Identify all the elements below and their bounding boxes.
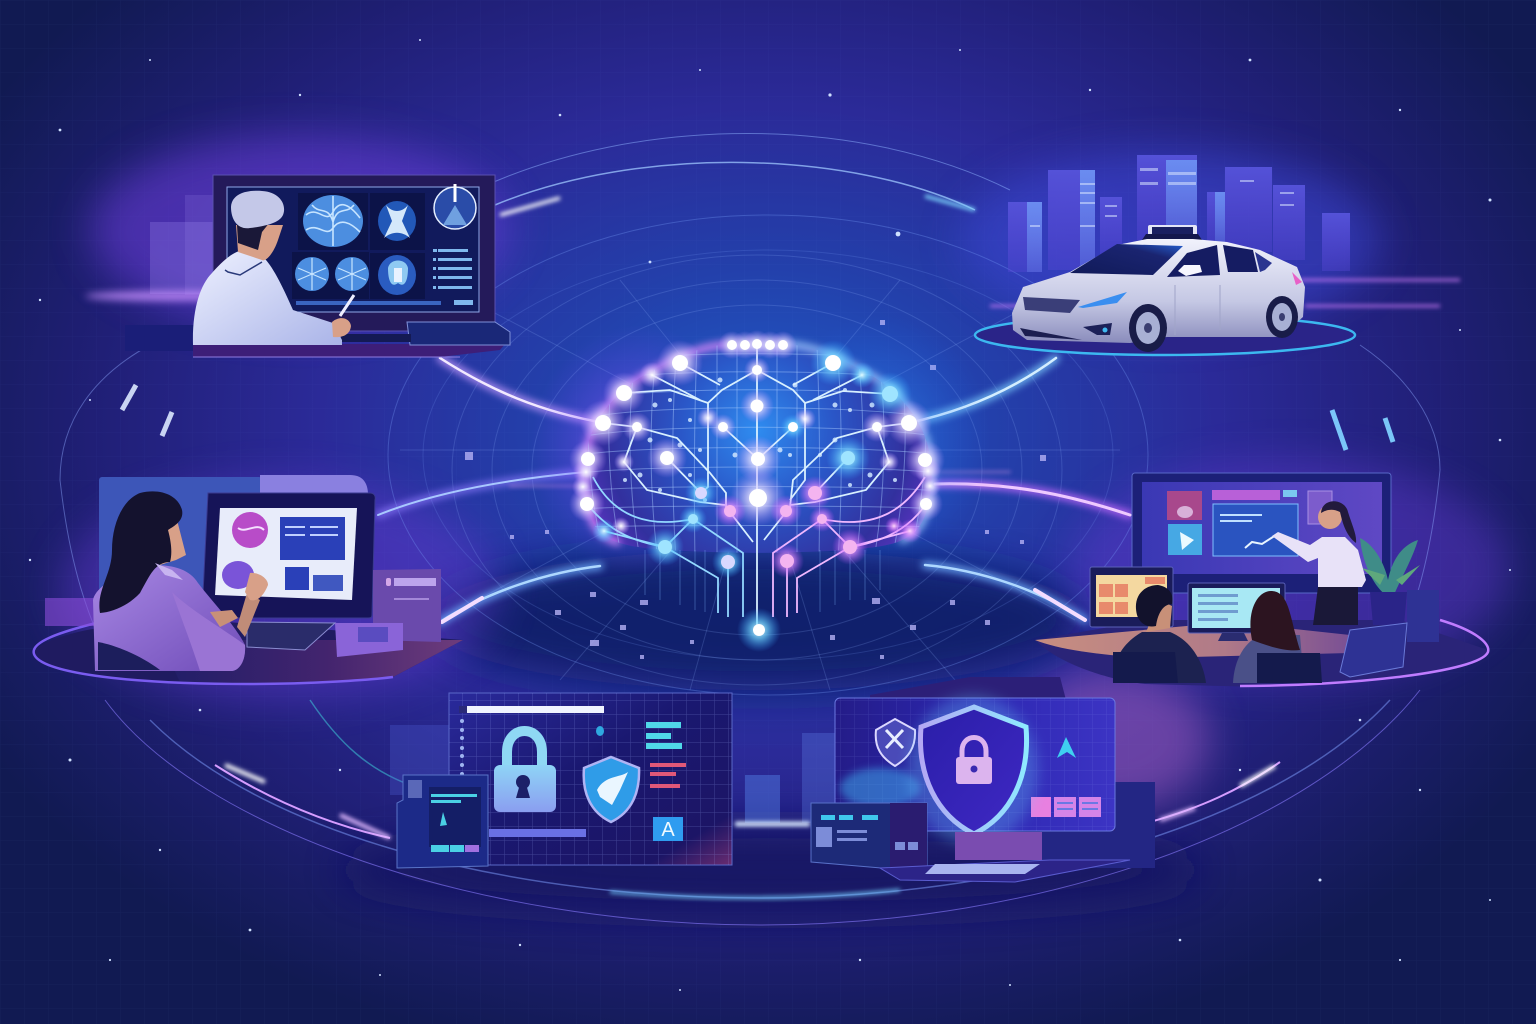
- wall screen: [1132, 473, 1391, 593]
- panel: team presentation: [1035, 473, 1488, 687]
- brain speckles: [623, 378, 897, 502]
- seated man: [1113, 585, 1206, 683]
- doctor: [193, 191, 354, 345]
- orbital rings: [60, 133, 1440, 925]
- brain rim glow: [584, 344, 932, 543]
- keyboard: [247, 622, 335, 650]
- icon: small shield: [584, 757, 639, 822]
- icon: large shield: [908, 695, 1038, 845]
- platform: [33, 620, 463, 684]
- icon: A badge: [653, 817, 683, 841]
- side unit: [1407, 590, 1439, 642]
- server block: [811, 803, 927, 872]
- panel: medical imaging: [85, 175, 510, 357]
- tablet: [335, 623, 403, 657]
- panel: lock screen: [390, 693, 732, 868]
- plant: [1360, 538, 1420, 625]
- side unit: [373, 569, 441, 642]
- platform: [1035, 620, 1488, 687]
- icon: padlock: [494, 731, 556, 812]
- monitor: [213, 175, 495, 331]
- city glow between panels: [735, 733, 835, 824]
- panel: shield security: [811, 677, 1155, 882]
- small monitors: [1090, 567, 1173, 627]
- fading drop lines: [645, 550, 880, 612]
- nodes: [569, 330, 945, 652]
- laptop: [880, 860, 1130, 882]
- panel: autonomous car: [975, 155, 1460, 355]
- brain mesh: [580, 345, 940, 560]
- icon: A badge: A: [661, 819, 675, 841]
- medical keyboard: [407, 322, 510, 345]
- skyline: [1008, 155, 1350, 272]
- radial network around brain: [400, 255, 1120, 690]
- monitor: [202, 493, 375, 618]
- circuit lines: blue: [603, 344, 909, 630]
- woman: [93, 491, 268, 671]
- empty chair: [1340, 623, 1407, 677]
- seated woman: [1233, 591, 1322, 683]
- car: [1012, 225, 1305, 352]
- connector lines: [378, 358, 1130, 622]
- server cube: [397, 775, 488, 868]
- back panel: [99, 477, 262, 592]
- presenter: [1272, 501, 1366, 625]
- desk: [125, 325, 505, 357]
- brain scans: [292, 184, 476, 305]
- pink console: [955, 832, 1042, 860]
- central AI brain: [543, 330, 972, 651]
- panel: designer at computer: [33, 475, 463, 684]
